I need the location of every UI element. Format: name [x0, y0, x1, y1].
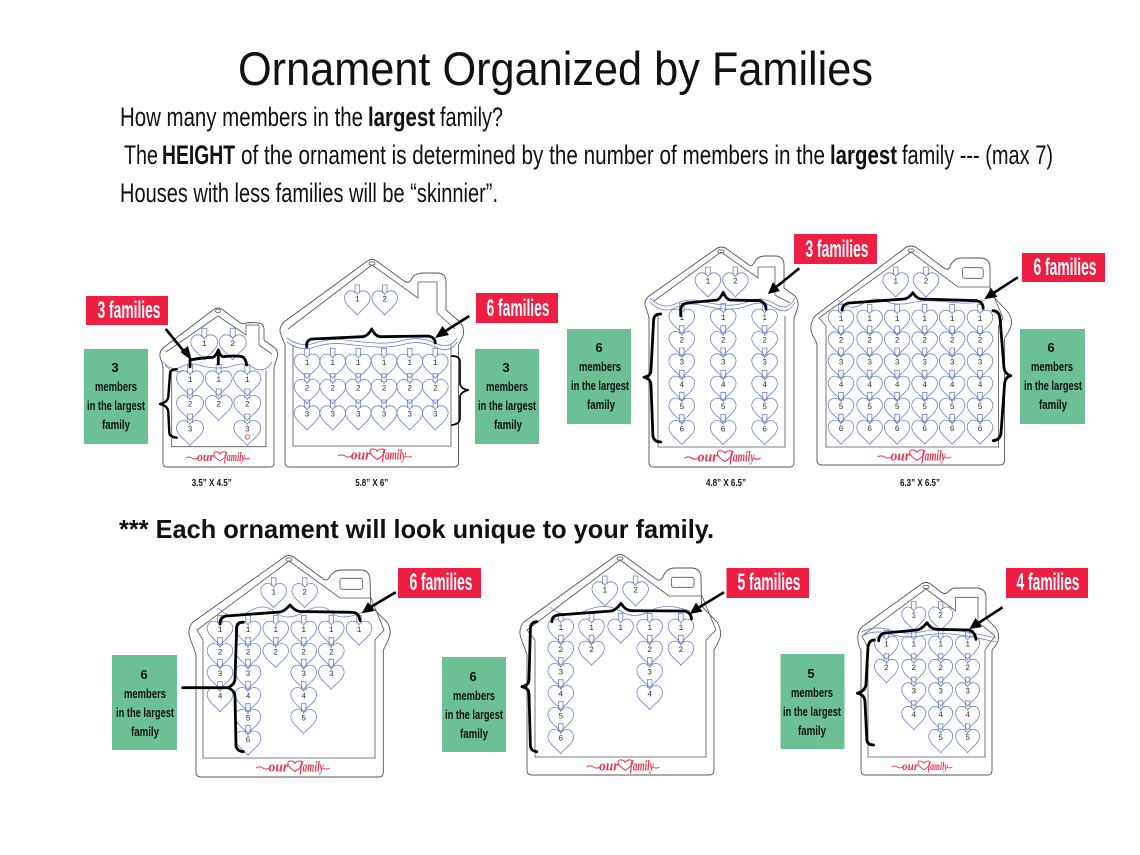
arrow — [444, 316, 469, 332]
house ornament: 6 families, 6 members: family — [921, 448, 946, 464]
house ornament: unique 4 families: our — [902, 759, 919, 773]
arrowhead — [768, 282, 780, 294]
house ornament: 3 families, 3 members: our — [197, 450, 214, 464]
note: 6 members: in the largest — [116, 705, 174, 720]
house ornament: 6 families, 6 members: 1 — [978, 315, 983, 324]
house ornament: unique 6 families: 1 — [218, 626, 223, 635]
member bracket: left — [644, 314, 661, 442]
house ornament: unique 5 families: 1 — [558, 624, 563, 633]
house ornament: 3 families, 6 members: 2 — [721, 336, 726, 345]
house ornament: 6 families, 3 members: 1 — [356, 359, 361, 368]
house ornament: 3 families, 6 members: our — [698, 450, 718, 466]
house ornament: unique 4 families: 1 — [938, 641, 943, 650]
house ornament: 6 families, 3 members: 1 — [355, 296, 360, 305]
house ornament: unique 6 families: 5 — [301, 714, 306, 723]
arrowhead — [362, 602, 374, 613]
title: Ornament Organized by Families — [238, 42, 873, 95]
house ornament: unique 4 families: 4 — [911, 711, 916, 720]
house ornament: 6 families, 6 members: 6 — [839, 425, 844, 434]
size label: 4.8” X 6.5” — [706, 478, 746, 489]
house ornament: 3 families, 6 members: 4 — [762, 381, 767, 390]
house ornament: 3 families, 6 members: 1 — [721, 314, 726, 323]
house ornament: unique 5 families: 2 — [589, 646, 594, 655]
note: 6 members: 6 — [595, 340, 603, 355]
house ornament: 3 families, 3 members: 2 — [230, 340, 235, 349]
label: 6 families — [398, 568, 481, 598]
house ornament: 6 families, 6 members: 2 — [867, 337, 872, 346]
house ornament: unique 4 families — [857, 582, 999, 775]
house ornament: unique 4 families: 2 — [911, 664, 916, 673]
member bracket: left — [160, 369, 177, 438]
house ornament: 6 families, 6 members — [811, 246, 1012, 465]
house ornament: 6 families, 3 members: family — [382, 447, 406, 463]
house ornament: 6 families, 6 members: 3 — [867, 359, 872, 368]
label: 6 families: 6 families — [486, 295, 550, 322]
house ornament: unique 6 families: 2 — [218, 648, 223, 657]
house ornament: unique 5 families: 4 — [647, 690, 652, 699]
house ornament: 6 families, 6 members: 6 — [867, 425, 872, 434]
house ornament: 6 families, 3 members: 3 — [407, 411, 412, 420]
arrowhead — [690, 602, 702, 614]
arrow — [992, 277, 1018, 294]
note: 6 members — [442, 657, 506, 752]
house ornament: 6 families, 3 members — [280, 260, 468, 467]
house ornament: 6 families, 6 members: 3 — [839, 359, 844, 368]
note: 3 members: in the largest — [478, 398, 536, 413]
intro text block: The — [124, 140, 158, 170]
label: 5 families — [726, 568, 809, 598]
house ornament: 3 families, 6 members: 5 — [721, 403, 726, 412]
house ornament: unique 6 families: family — [300, 759, 324, 775]
note: 3 members: family — [102, 417, 131, 432]
house ornament: unique 4 families: 2 — [938, 664, 943, 673]
house ornament: unique 6 families: 4 — [218, 692, 223, 701]
house ornament: unique 5 families: 2 — [633, 587, 638, 596]
house ornament: unique 4 families: 3 — [938, 687, 943, 696]
house ornament: unique 5 families: 5 — [558, 712, 563, 721]
arrowhead — [180, 346, 192, 361]
note: 3 members — [475, 349, 539, 444]
house ornament: unique 4 families: 2 — [884, 664, 889, 673]
house ornament: 3 families, 3 members — [160, 308, 278, 467]
house ornament: unique 6 families: 4 — [301, 692, 306, 701]
note: 6 members: members — [579, 359, 621, 374]
house ornament: 6 families, 3 members: 2 — [330, 384, 335, 393]
house ornament: unique 4 families: 1 — [911, 641, 916, 650]
family bracket: top — [681, 292, 766, 316]
house ornament: unique 4 families: 1 — [965, 641, 970, 650]
label: 6 families — [1022, 253, 1105, 282]
house ornament: 6 families, 3 members: 3 — [433, 411, 438, 420]
house ornament: 6 families, 6 members: 3 — [895, 359, 900, 368]
family bracket: top — [190, 350, 247, 367]
note: 6 members: members — [1031, 359, 1073, 374]
note: 3 members: members — [486, 379, 528, 394]
house ornament: unique 5 families: 1 — [678, 624, 683, 633]
house ornament: unique 6 families: 5 — [246, 714, 251, 723]
house ornament: 3 families, 3 members: 2 — [245, 401, 250, 410]
note: 6 members: 6 — [1047, 340, 1055, 355]
label: 3 families: 3 families — [806, 236, 868, 263]
house ornament: unique 6 families: 3 — [246, 670, 251, 679]
note: 5 members: family — [798, 723, 827, 738]
house ornament: 6 families, 3 members: 3 — [356, 411, 361, 420]
house ornament: 6 families, 6 members: 1 — [922, 315, 927, 324]
arrow — [775, 268, 799, 288]
house ornament: unique 4 families: 5 — [965, 734, 970, 743]
house ornament: unique 4 families: 2 — [965, 664, 970, 673]
house ornament: 6 families, 6 members: 2 — [978, 337, 983, 346]
label: 6 families: 6 families — [410, 569, 472, 596]
house ornament: unique 4 families: 4 — [938, 711, 943, 720]
house ornament: unique 4 families: 5 — [938, 734, 943, 743]
house ornament: 3 families, 6 members: 5 — [679, 403, 684, 412]
house ornament: 6 families, 3 members: 2 — [382, 296, 387, 305]
house ornament: 3 families, 6 members: 6 — [721, 425, 726, 434]
house ornament: 6 families, 6 members: 1 — [893, 278, 898, 287]
house ornament: 3 families, 6 members: 3 — [679, 359, 684, 368]
house ornament: 6 families, 6 members: 3 — [950, 359, 955, 368]
size label: 3.5” X 4.5” — [192, 478, 232, 489]
intro text block: HEIGHT — [162, 140, 235, 170]
house ornament: unique 5 families: 3 — [558, 668, 563, 677]
house ornament: 6 families, 6 members: 1 — [867, 315, 872, 324]
label: 3 families — [794, 234, 877, 264]
intro text block: family? — [440, 102, 503, 132]
member bracket: left — [857, 640, 874, 745]
house ornament: unique 4 families: family — [928, 759, 948, 773]
intro text block: How many members in the — [120, 102, 363, 132]
house ornament: 6 families, 3 members: 2 — [356, 384, 361, 393]
house ornament: unique 6 families: 1 — [273, 626, 278, 635]
house ornament: 3 families, 6 members: 2 — [733, 278, 738, 287]
house ornament: unique 5 families: family — [630, 758, 654, 774]
house ornament: 6 families, 6 members: 2 — [895, 337, 900, 346]
house ornament: unique 5 families: 4 — [558, 690, 563, 699]
house ornament: unique 6 families: 1 — [301, 626, 306, 635]
house ornament: 6 families, 6 members: 4 — [978, 381, 983, 390]
house ornament: 3 families, 6 members: family — [730, 450, 755, 466]
house ornament: unique 4 families: 1 — [911, 612, 916, 621]
house ornament: 6 families, 6 members: 3 — [922, 359, 927, 368]
note: 5 members: 5 — [807, 666, 815, 681]
note: 6 members — [1020, 329, 1085, 424]
note: 6 members — [112, 655, 177, 750]
house ornament: 6 families, 6 members: 5 — [922, 403, 927, 412]
label: 4 families — [1006, 568, 1088, 598]
house ornament: 6 families, 3 members: 1 — [382, 359, 387, 368]
house ornament: 3 families, 6 members: 5 — [762, 403, 767, 412]
house ornament: 6 families, 3 members: 2 — [407, 384, 412, 393]
house ornament: unique 5 families: 1 — [589, 624, 594, 633]
note: 3 members: family — [494, 417, 523, 432]
house ornament: 3 families, 6 members: 2 — [762, 336, 767, 345]
note: 6 members: family — [460, 726, 489, 741]
house ornament: 6 families, 3 members: 2 — [382, 384, 387, 393]
member bracket: left — [522, 622, 537, 752]
house ornament: 3 families, 6 members: 6 — [679, 425, 684, 434]
arrowhead — [435, 326, 449, 338]
house ornament: 6 families, 3 members: 1 — [330, 359, 335, 368]
house ornament: 3 families, 6 members: 1 — [679, 314, 684, 323]
house ornament: 3 families, 6 members: 3 — [762, 359, 767, 368]
house ornament: 6 families, 6 members: 1 — [839, 315, 844, 324]
house ornament: 6 families, 3 members: our — [351, 447, 371, 463]
house ornament: 6 families, 6 members: 2 — [839, 337, 844, 346]
house ornament: 6 families, 3 members: 2 — [305, 384, 310, 393]
house ornament: 6 families, 6 members: 4 — [867, 381, 872, 390]
house ornament: unique 4 families: 2 — [938, 612, 943, 621]
intro text block: Houses with less families will be “skinnier”. — [120, 178, 498, 208]
arrow — [977, 607, 1003, 624]
note: 6 members: family — [1039, 397, 1068, 412]
house ornament: unique 6 families: 1 — [271, 588, 276, 597]
house ornament: unique 5 families: 1 — [602, 587, 607, 596]
house ornament: unique 6 families: 3 — [329, 670, 334, 679]
note: 6 members: 6 — [140, 667, 148, 682]
note: 6 members: in the largest — [1024, 378, 1082, 393]
note: 3 members: 3 — [111, 360, 119, 375]
arrow — [369, 592, 396, 608]
house ornament: 6 families, 3 members: 3 — [305, 411, 310, 420]
house ornament: 3 families, 3 members: 2 — [216, 401, 221, 410]
house ornament: unique 6 families: 2 — [329, 648, 334, 657]
size label: 5.8” X 6” — [355, 478, 388, 489]
house ornament: unique 5 families: our — [599, 758, 619, 774]
house ornament: unique 5 families: 2 — [647, 646, 652, 655]
house ornament: unique 6 families: 4 — [246, 692, 251, 701]
house ornament: 6 families, 3 members: 1 — [433, 359, 438, 368]
note: 5 members: in the largest — [783, 704, 841, 719]
note: 3 members — [84, 349, 148, 444]
house ornament: 6 families, 6 members: 6 — [895, 425, 900, 434]
house ornament: unique 6 families: 2 — [246, 648, 251, 657]
intro text block: family --- (max 7) — [902, 140, 1053, 170]
note: 3 members: members — [95, 379, 137, 394]
house ornament: 6 families, 6 members: 5 — [839, 403, 844, 412]
house ornament: 3 families, 6 members: 4 — [679, 381, 684, 390]
house ornament: 6 families, 6 members: 4 — [950, 381, 955, 390]
note: 6 members: family — [587, 397, 616, 412]
house ornament: unique 4 families: 3 — [911, 687, 916, 696]
note: 5 members: members — [791, 685, 833, 700]
house ornament: 6 families, 6 members: 6 — [978, 425, 983, 434]
note: 5 members — [780, 654, 844, 749]
house ornament: 6 families, 6 members: 1 — [895, 315, 900, 324]
house ornament: 3 families, 3 members: 1 — [202, 340, 207, 349]
house ornament: 6 families, 6 members: 3 — [978, 359, 983, 368]
member bracket: left — [183, 622, 243, 752]
note: 6 members: in the largest — [445, 707, 503, 722]
note: 6 members: members — [453, 688, 495, 703]
subheading: *** Each ornament will look unique to your family. — [119, 514, 714, 544]
house ornament: 3 families, 6 members: 6 — [762, 425, 767, 434]
member bracket: right — [993, 311, 1011, 441]
house ornament: unique 5 families: 2 — [558, 646, 563, 655]
house ornament: 3 families, 3 members: family — [224, 450, 245, 464]
note: 3 members: in the largest — [87, 398, 145, 413]
intro text block: largest — [830, 140, 897, 170]
family bracket: top — [552, 603, 692, 622]
intro text block: largest — [368, 102, 435, 132]
house ornament: unique 6 families: 1 — [246, 626, 251, 635]
house ornament: unique 5 families: 1 — [647, 624, 652, 633]
house ornament: 6 families, 6 members: 5 — [867, 403, 872, 412]
house ornament: 6 families, 3 members: 3 — [382, 411, 387, 420]
house ornament: unique 5 families: 2 — [678, 646, 683, 655]
family bracket: top — [307, 329, 435, 347]
house ornament: 3 families, 6 members: 1 — [762, 314, 767, 323]
house ornament: 3 families, 6 members: 2 — [679, 336, 684, 345]
size label: 6.3” X 6.5” — [900, 478, 940, 489]
house ornament: unique 4 families: 3 — [965, 687, 970, 696]
label: 6 families: 6 families — [1034, 254, 1096, 281]
member bracket: right — [452, 356, 468, 425]
family bracket: top — [879, 623, 976, 641]
house ornament: 3 families, 3 members: 2 — [188, 401, 193, 410]
house ornament: 6 families, 3 members: 1 — [305, 359, 310, 368]
house ornament: unique 5 families: 6 — [558, 734, 563, 743]
note: 6 members: members — [124, 686, 166, 701]
intro text block — [120, 102, 1053, 208]
intro text block: of the ornament is determined by the number of members in the — [241, 140, 825, 170]
house ornament: 3 families, 3 members: 1 — [188, 376, 193, 385]
house ornament: 6 families, 6 members: 4 — [839, 381, 844, 390]
house ornament: unique 6 families: our — [269, 759, 288, 775]
house ornament: 3 families, 3 members: 1 — [245, 376, 250, 385]
family bracket: top — [220, 605, 360, 624]
house ornament: 3 families, 6 members: 4 — [721, 381, 726, 390]
house ornament: unique 6 families: 2 — [302, 588, 307, 597]
house ornament: 6 families, 6 members: 2 — [950, 337, 955, 346]
note: 3 members: 3 — [502, 360, 510, 375]
house ornament: 6 families, 3 members: 2 — [433, 384, 438, 393]
house ornament: 6 families, 6 members: 4 — [922, 381, 927, 390]
arrowhead — [969, 618, 982, 629]
house ornament: 3 families, 6 members — [644, 247, 798, 467]
house ornament: 3 families, 6 members: 1 — [705, 278, 710, 287]
house ornament: 6 families, 6 members: 5 — [895, 403, 900, 412]
label: 4 families: 4 families — [1016, 569, 1080, 596]
house ornament: unique 6 families: 6 — [246, 736, 251, 745]
house ornament: 3 families, 3 members: 3 — [245, 426, 250, 435]
note: 6 members: 6 — [469, 669, 477, 684]
house ornament: 6 families, 3 members: 1 — [407, 359, 412, 368]
house ornament: 3 families, 6 members: 3 — [721, 359, 726, 368]
label: 3 families: 3 families — [98, 297, 160, 324]
house ornament: unique 6 families: 3 — [218, 670, 223, 679]
house ornament: 6 families, 3 members: 3 — [330, 411, 335, 420]
house ornament: 3 families, 3 members: 1 — [216, 376, 221, 385]
house ornament: unique 6 families: 2 — [273, 648, 278, 657]
house ornament: unique 6 families: 3 — [301, 670, 306, 679]
note: 6 members: family — [131, 724, 160, 739]
arrow — [698, 592, 724, 608]
label: 3 families — [86, 296, 168, 325]
arrowhead — [984, 288, 998, 299]
label: 5 families: 5 families — [738, 569, 800, 596]
house ornament: unique 5 families — [520, 554, 721, 775]
label: 6 families — [476, 293, 558, 323]
house ornament: 6 families, 6 members: 2 — [924, 278, 929, 287]
family bracket: top — [842, 293, 983, 310]
arrow — [166, 329, 186, 354]
house ornament: 6 families, 6 members: 6 — [950, 425, 955, 434]
house ornament: 6 families, 6 members: 2 — [922, 337, 927, 346]
house ornament: unique 6 families: 1 — [329, 626, 334, 635]
house ornament: 6 families, 6 members: 5 — [950, 403, 955, 412]
house ornament: unique 6 families — [183, 556, 390, 777]
house ornament: 6 families, 6 members: 6 — [922, 425, 927, 434]
house ornament: unique 6 families: 2 — [301, 648, 306, 657]
house ornament: 6 families, 6 members: 5 — [978, 403, 983, 412]
house ornament: 6 families, 6 members: 1 — [950, 315, 955, 324]
house ornament: unique 6 families: 1 — [357, 626, 362, 635]
house ornament: 3 families, 3 members: 3 — [188, 426, 193, 435]
house ornament: 6 families, 6 members: 4 — [895, 381, 900, 390]
house ornament: unique 5 families: 3 — [647, 668, 652, 677]
note: 6 members — [567, 329, 631, 424]
house ornament: unique 4 families: 4 — [965, 711, 970, 720]
note: 6 members: in the largest — [571, 378, 629, 393]
house ornament: unique 4 families: 1 — [884, 641, 889, 650]
house ornament: 6 families, 6 members: our — [890, 448, 910, 464]
house ornament: unique 5 families: 1 — [618, 624, 623, 633]
